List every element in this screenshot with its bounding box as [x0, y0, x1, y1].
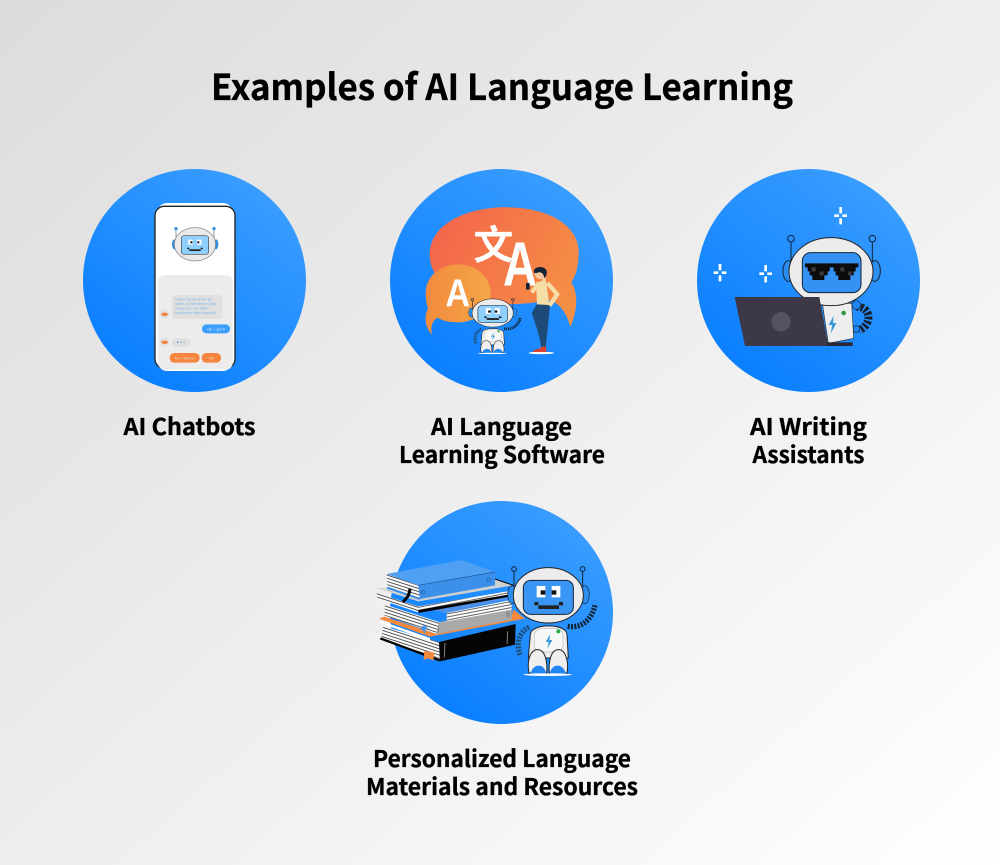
icon: translation bubbles with robot and learner: [426, 207, 579, 354]
icon: phone chat: [155, 203, 235, 371]
title: Examples of AI Language Learning: [211, 59, 793, 111]
icon: translation bubbles with robot and learner: A: [445, 272, 470, 316]
circle: personalized materials background: [390, 501, 613, 724]
circle: language software background: [390, 169, 613, 392]
icon: phone chat: OK: [209, 356, 215, 360]
label: AI Writing Assistants: Assistants: [752, 436, 864, 470]
icon: phone chat: iscing elit, sed diam: [175, 306, 208, 310]
icon: robot: [508, 567, 595, 676]
label: AI Writing Assistants: AI Writing: [749, 408, 867, 442]
panel: AI Chatbots: [83, 169, 306, 442]
circle: chatbots background: [83, 169, 306, 392]
panel: AI Language Learning Software: [390, 169, 613, 470]
label: Personalized Language Materials and Resources: Materials and Resources: [366, 768, 638, 802]
icon: sparkles: [714, 207, 847, 282]
label: Personalized Language Materials and Resources: Personalized Language: [373, 740, 631, 774]
icon: translation bubbles with robot and learner: 文: [473, 213, 513, 271]
icon: phone chat: amet, consectetuer adip: [175, 302, 216, 306]
icon: robot with sunglasses at laptop: [735, 235, 880, 346]
label: AI Language Learning Software: Learning Software: [399, 436, 605, 470]
icon: stack of books: [374, 560, 595, 676]
circle: writing assistants background: [697, 169, 920, 392]
icon: translation bubbles with robot and learner: A: [503, 231, 537, 300]
panel: AI Writing Assistants: [697, 169, 920, 470]
label: AI Chatbots: AI Chatbots: [122, 408, 256, 442]
icon: phone chat: Ok, I got it: [207, 327, 226, 331]
icon: phone chat: No, I dunno: [175, 356, 195, 360]
icon: phone chat: Lorem ipsum dolor sit: [175, 298, 213, 302]
icon: phone chat: nonummy nibh euismod: [175, 311, 216, 315]
panel: Personalized Language Materials and Resources: [366, 501, 638, 802]
label: AI Language Learning Software: AI Language: [430, 408, 572, 442]
